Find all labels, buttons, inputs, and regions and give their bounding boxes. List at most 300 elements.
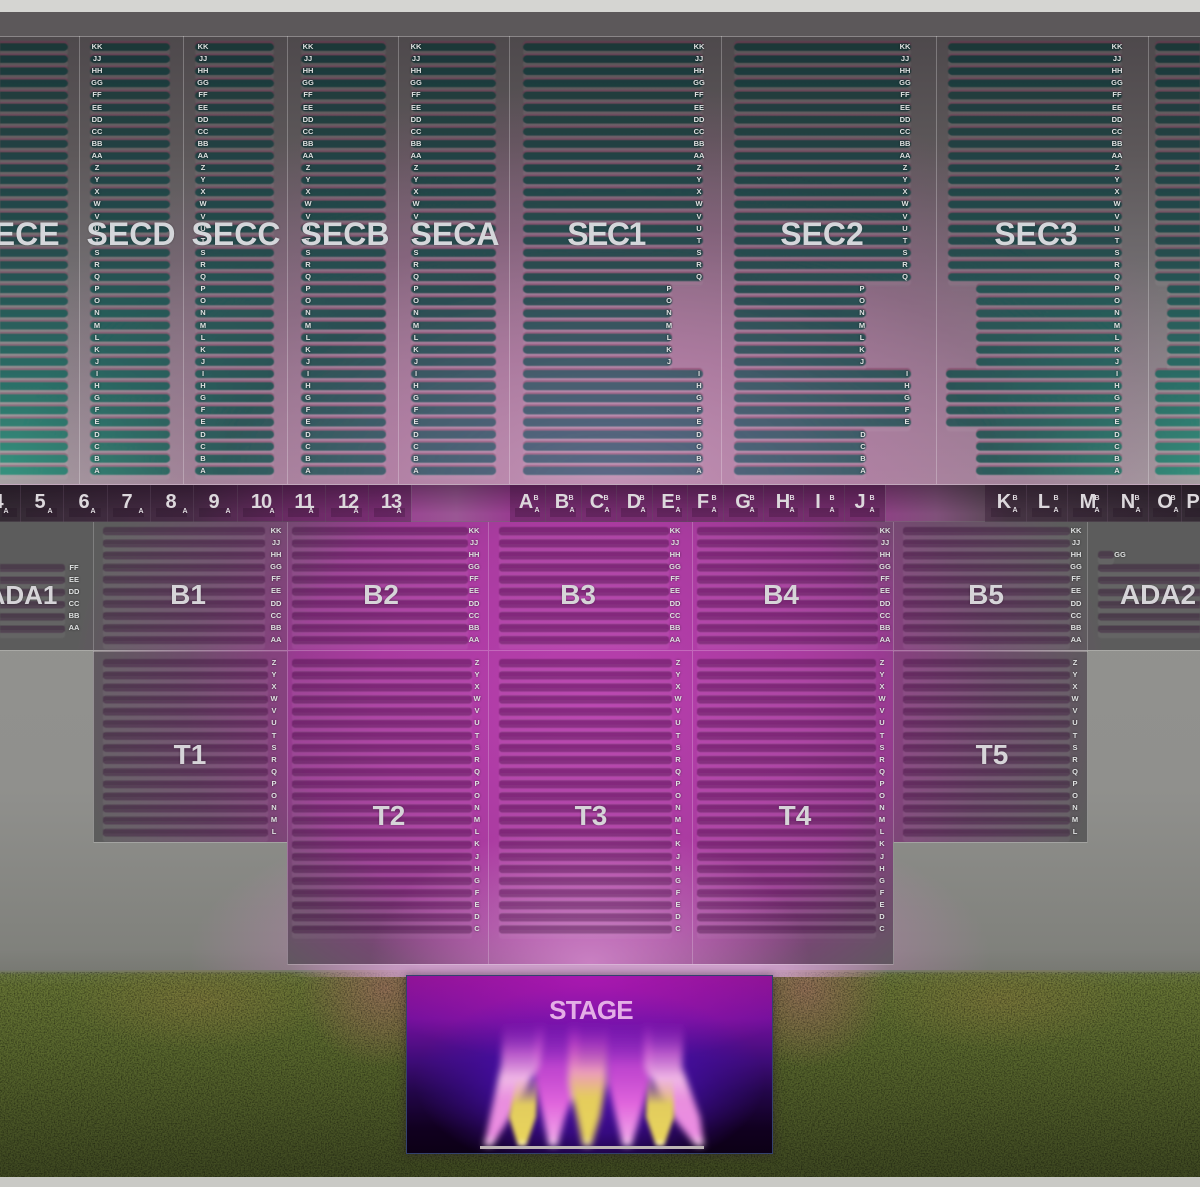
section SEC3	[994, 42, 1123, 475]
row labels P to J: L	[667, 333, 671, 342]
row labels I to E: I	[906, 369, 908, 378]
row labels: U	[271, 718, 277, 727]
row label GG: GG	[1114, 550, 1126, 559]
row labels: W	[93, 199, 101, 208]
row labels: BB	[1071, 623, 1081, 632]
row labels: J	[475, 852, 479, 860]
row labels: AA	[69, 623, 79, 632]
row labels: GG	[197, 78, 209, 87]
numbered tabs	[0, 491, 402, 515]
row labels KK to Q: V	[696, 212, 702, 221]
row labels	[468, 526, 480, 644]
row labels: FF	[92, 90, 102, 99]
row labels: Z	[272, 658, 276, 667]
row labels: L	[880, 827, 884, 836]
title T1: T1	[174, 739, 206, 770]
grass texture	[0, 972, 1200, 1177]
title SECA: SECA	[411, 216, 499, 252]
row labels: CC	[303, 127, 313, 136]
row labels: N	[474, 803, 480, 812]
lettered tabs A to J: H	[776, 491, 790, 513]
row labels KK to Q: KK	[900, 42, 910, 51]
row labels: U	[413, 224, 419, 233]
row labels: K	[474, 839, 480, 848]
row labels: W	[1071, 694, 1079, 703]
row labels	[1111, 42, 1123, 475]
row labels I to A: D	[696, 430, 702, 439]
lower panel seat rows	[0, 526, 1200, 938]
row labels: W	[1113, 199, 1121, 208]
row labels: FF	[69, 563, 79, 572]
row labels: FF	[411, 90, 421, 99]
row labels: GG	[1070, 562, 1082, 571]
row labels: V	[1072, 706, 1078, 715]
row labels: X	[94, 187, 100, 196]
row labels: E	[94, 417, 100, 426]
lettered tabs A to J	[519, 491, 875, 514]
row labels: Q	[1114, 272, 1120, 281]
row labels: H	[94, 381, 100, 390]
row labels P to J: M	[859, 321, 865, 330]
row labels KK to Q: EE	[694, 103, 704, 112]
panel ADA2	[1087, 522, 1200, 650]
row labels	[410, 42, 422, 475]
row labels: HH	[1071, 550, 1081, 559]
lettered tabs A to J: A	[829, 507, 835, 514]
row labels: B	[305, 454, 311, 463]
row labels: BB	[1112, 139, 1122, 148]
row labels: K	[94, 345, 100, 354]
lettered tabs K to P: A	[1135, 507, 1141, 514]
row labels: C	[200, 442, 206, 451]
row labels: W	[270, 694, 278, 703]
row labels: Z	[1115, 163, 1119, 172]
row labels: JJ	[1113, 54, 1121, 63]
row labels: P	[305, 284, 310, 293]
lettered tabs K to P: B	[1094, 495, 1100, 502]
row labels KK to Q: Q	[902, 272, 908, 281]
row labels: DD	[198, 115, 208, 124]
row labels: DD	[469, 599, 479, 608]
row labels: T	[475, 731, 479, 740]
row labels: T	[1073, 731, 1077, 740]
row labels: JJ	[470, 538, 478, 547]
row labels: HH	[198, 66, 208, 75]
panel B2	[363, 526, 480, 644]
title SECD: SECD	[87, 216, 175, 252]
row labels: K	[413, 345, 419, 354]
row labels: Q	[305, 272, 311, 281]
row labels: CC	[880, 611, 890, 620]
row labels: Y	[675, 670, 680, 679]
row labels D to A: C	[860, 442, 866, 451]
title SEC1: SEC1	[567, 216, 645, 252]
row labels: K	[305, 345, 311, 354]
numbered tabs: A	[47, 508, 53, 515]
row labels: R	[675, 755, 681, 764]
row labels: H	[413, 381, 419, 390]
row labels: L	[1073, 827, 1077, 836]
panel T4	[692, 652, 893, 964]
row labels: X	[305, 187, 310, 196]
row labels: C	[879, 924, 885, 933]
row labels: N	[879, 803, 885, 812]
row labels KK to Q: GG	[693, 78, 705, 87]
lettered tabs A to J: A	[569, 507, 575, 514]
row labels: X	[271, 682, 276, 691]
row labels: L	[676, 827, 680, 836]
lettered tabs A to J: B	[675, 495, 681, 502]
row labels: O	[94, 296, 100, 305]
row labels: D	[474, 912, 480, 921]
lettered tabs K to P: B	[1134, 495, 1140, 502]
row labels KK to Q: R	[902, 260, 908, 269]
panel B3	[560, 526, 682, 644]
row labels: O	[1114, 296, 1120, 305]
numbered tabs: A	[90, 508, 96, 515]
row labels: F	[201, 405, 205, 414]
row labels: DD	[880, 599, 890, 608]
row labels: U	[94, 224, 100, 233]
lettered tabs A to J: A	[711, 507, 717, 514]
row labels I to E: F	[905, 405, 909, 414]
lettered tabs A to J: B	[555, 491, 569, 513]
row labels: G	[200, 393, 206, 402]
row labels: JJ	[93, 54, 101, 63]
row labels: L	[306, 333, 310, 342]
lettered tabs A to J: A	[640, 507, 646, 514]
row labels	[262, 657, 286, 838]
section tabs strip	[0, 485, 1200, 522]
title T5: T5	[976, 739, 1008, 770]
row labels: GG	[468, 562, 480, 571]
panel B5	[968, 526, 1082, 644]
row labels	[668, 526, 682, 644]
lettered tabs A to J: A	[604, 507, 610, 514]
row labels: S	[94, 248, 100, 257]
row labels: M	[271, 815, 277, 824]
row labels I to A: F	[697, 405, 701, 414]
lettered tabs K to P: A	[1094, 507, 1100, 514]
row labels: J	[306, 357, 310, 366]
row labels KK to Q: Z	[903, 163, 907, 172]
row labels: U	[879, 718, 885, 727]
row labels: Y	[474, 670, 480, 679]
row labels: S	[305, 248, 310, 257]
lower panels backgrounds	[0, 522, 1200, 964]
row labels: W	[199, 199, 207, 208]
row labels: X	[474, 682, 480, 691]
row labels: F	[475, 888, 479, 897]
row labels: D	[1114, 430, 1120, 438]
lettered tabs A to J: F	[697, 491, 709, 513]
row labels: GG	[91, 78, 103, 87]
title B1: B1	[170, 579, 206, 610]
row labels: Y	[305, 175, 310, 184]
row labels: M	[305, 321, 311, 330]
row labels: U	[474, 718, 480, 727]
row labels	[197, 42, 209, 475]
row labels KK to Q: FF	[694, 90, 704, 99]
row labels: T	[1115, 236, 1119, 245]
title T3: T3	[575, 800, 607, 831]
row labels	[465, 657, 489, 935]
row labels: Q	[1072, 767, 1078, 776]
row labels: C	[675, 924, 681, 933]
row labels: Y	[200, 175, 206, 184]
row labels: J	[95, 357, 99, 366]
row labels KK to Q: U	[696, 224, 702, 233]
row labels: EE	[411, 103, 421, 112]
lettered tabs A to J: B	[568, 495, 574, 502]
row labels: X	[1114, 187, 1120, 196]
row labels: E	[305, 417, 310, 426]
row labels: G	[1114, 393, 1120, 402]
panel B1	[170, 526, 282, 644]
row labels: X	[1072, 682, 1078, 691]
row labels: F	[1115, 405, 1119, 414]
row labels: T	[306, 236, 310, 245]
row labels: M	[1114, 321, 1120, 330]
row labels: V	[305, 212, 310, 221]
row labels: Q	[474, 767, 480, 776]
row labels: JJ	[199, 54, 207, 63]
row labels: T	[272, 731, 276, 740]
row labels	[68, 563, 80, 632]
row labels: Z	[1073, 658, 1077, 667]
row labels: M	[94, 321, 100, 330]
panel T5	[893, 652, 1087, 842]
numbered tabs: A	[182, 508, 188, 515]
numbered tabs: A	[138, 508, 144, 515]
row labels: W	[473, 694, 481, 703]
row labels: C	[305, 442, 311, 451]
row labels I to A: H	[696, 381, 702, 390]
row labels: L	[414, 333, 418, 342]
row labels: AA	[303, 151, 313, 160]
row labels: S	[879, 743, 884, 752]
row labels	[1070, 526, 1082, 644]
row labels: B	[94, 454, 100, 463]
row labels: FF	[303, 90, 313, 99]
numbered tabs: 8	[165, 491, 177, 513]
lettered tabs K to P: A	[1053, 507, 1059, 514]
row labels	[302, 42, 314, 475]
row labels: T	[676, 731, 680, 740]
row labels	[1063, 657, 1087, 838]
row labels: X	[675, 682, 680, 691]
row labels: FF	[469, 574, 479, 583]
row labels P to J: L	[860, 333, 864, 342]
row labels: O	[1072, 791, 1078, 800]
row labels KK to Q: X	[902, 187, 908, 196]
row labels: JJ	[412, 54, 420, 63]
row labels: D	[94, 430, 100, 438]
row labels: Z	[880, 658, 884, 667]
row labels KK to Q: BB	[900, 139, 910, 148]
row labels: HH	[469, 550, 479, 559]
row labels: O	[879, 791, 885, 800]
row labels: Z	[306, 163, 310, 172]
row labels P to J: J	[667, 357, 671, 366]
row labels: I	[1116, 369, 1118, 378]
row labels: K	[879, 839, 885, 848]
numbered tabs: A	[225, 508, 231, 515]
numbered tabs: A	[3, 508, 9, 515]
row labels: U	[200, 224, 206, 233]
row labels: E	[413, 417, 418, 426]
stage title: STAGE	[549, 995, 633, 1025]
row labels: P	[675, 779, 680, 788]
numbered tabs: 6	[78, 491, 90, 513]
row labels: D	[413, 430, 419, 438]
row labels: EE	[880, 586, 890, 595]
row labels: EE	[271, 586, 281, 595]
row labels: S	[200, 248, 206, 257]
row labels: G	[879, 876, 885, 885]
row labels: T	[414, 236, 418, 245]
panel T3	[488, 652, 692, 964]
lettered tabs A to J: B	[789, 495, 795, 502]
row labels: V	[94, 212, 100, 221]
lettered tabs A to J: C	[590, 491, 604, 513]
row labels KK to Q: CC	[694, 127, 704, 136]
row labels	[666, 657, 690, 935]
row labels: FF	[880, 574, 890, 583]
row labels: J	[676, 852, 680, 860]
row labels: I	[96, 369, 98, 378]
row labels: M	[675, 815, 681, 824]
row labels: K	[1114, 345, 1120, 354]
row labels: U	[675, 718, 681, 727]
row labels: CC	[1112, 127, 1122, 136]
row labels: Q	[271, 767, 277, 776]
row labels: D	[305, 430, 311, 438]
title SECB: SECB	[301, 216, 389, 252]
row labels: S	[675, 743, 680, 752]
row labels: S	[1072, 743, 1078, 752]
row labels: CC	[69, 599, 79, 608]
glow above stage	[290, 962, 890, 977]
row labels P to J: O	[666, 296, 672, 305]
row labels KK to Q: Z	[697, 163, 701, 172]
light bar	[480, 1146, 704, 1149]
row labels: FF	[198, 90, 208, 99]
row labels: AA	[1112, 151, 1122, 160]
row labels KK to Q: DD	[694, 115, 704, 124]
row labels: L	[272, 827, 276, 836]
row labels: H	[474, 864, 480, 873]
row labels: R	[94, 260, 100, 269]
lettered tabs K to P: A	[1173, 507, 1179, 514]
row labels: O	[271, 791, 277, 800]
row labels: J	[201, 357, 205, 366]
row labels: KK	[92, 42, 102, 51]
row labels KK to Q: Y	[902, 175, 908, 184]
row labels: P	[1072, 779, 1078, 788]
row labels KK to Q: BB	[694, 139, 704, 148]
row labels: G	[413, 393, 419, 402]
row labels: E	[1114, 417, 1120, 426]
row labels: C	[1114, 442, 1120, 451]
lettered tabs A to J: A	[869, 507, 875, 514]
row labels: GG	[1111, 78, 1123, 87]
row labels: EE	[92, 103, 102, 112]
row labels: P	[1114, 284, 1120, 293]
row labels: A	[305, 466, 311, 475]
row labels KK to Q: FF	[900, 90, 910, 99]
row labels: W	[412, 199, 420, 208]
row labels P to J: K	[666, 345, 672, 354]
section SECC	[192, 42, 280, 475]
row labels KK to Q: GG	[899, 78, 911, 87]
row labels KK to Q: EE	[900, 103, 910, 112]
title SECC: SECC	[192, 216, 280, 252]
numbered tabs: A	[308, 508, 314, 515]
row labels: A	[413, 466, 419, 475]
row labels: KK	[198, 42, 208, 51]
row labels: Z	[676, 658, 680, 667]
row labels: X	[200, 187, 206, 196]
row labels: Y	[879, 670, 884, 679]
row labels: CC	[92, 127, 102, 136]
row labels: P	[271, 779, 276, 788]
row labels: Q	[200, 272, 206, 281]
row labels: V	[1114, 212, 1120, 221]
row labels P to J: P	[859, 284, 864, 293]
row labels: E	[474, 900, 480, 909]
lettered tabs A to J: D	[627, 491, 641, 513]
row labels: J	[880, 852, 884, 860]
row labels: Z	[95, 163, 99, 172]
lettered tabs K to P: O	[1157, 491, 1173, 513]
title B4: B4	[763, 579, 799, 610]
row labels: HH	[1112, 66, 1122, 75]
row labels KK to Q: CC	[900, 127, 910, 136]
row labels: Z	[201, 163, 205, 172]
row labels: L	[201, 333, 205, 342]
row labels: K	[675, 839, 681, 848]
row labels: KK	[880, 526, 890, 535]
row labels: A	[1114, 466, 1120, 475]
row labels I to A: E	[696, 417, 702, 426]
row labels: EE	[1071, 586, 1081, 595]
row labels: B	[200, 454, 206, 463]
numbered tabs: A	[396, 508, 402, 515]
row labels: H	[675, 864, 681, 873]
numbered tabs: 11	[294, 491, 314, 513]
lettered tabs A to J: I	[815, 491, 821, 513]
row labels: A	[200, 466, 206, 475]
row labels P to J: M	[666, 321, 672, 330]
upper stand section dividers	[79, 36, 1149, 484]
row labels KK to Q	[899, 42, 911, 282]
row labels: AA	[411, 151, 421, 160]
row labels: J	[414, 357, 418, 366]
row labels: AA	[670, 635, 680, 644]
row labels KK to Q: R	[696, 260, 702, 269]
row labels: Q	[94, 272, 100, 281]
row labels: R	[879, 755, 885, 764]
row labels: BB	[880, 623, 890, 632]
row labels: Y	[1072, 670, 1078, 679]
row labels: Y	[1114, 175, 1120, 184]
row labels: Q	[879, 767, 885, 776]
row labels P to J: N	[859, 308, 865, 317]
row labels: L	[475, 827, 479, 836]
row labels: P	[474, 779, 480, 788]
row labels: P	[94, 284, 100, 293]
